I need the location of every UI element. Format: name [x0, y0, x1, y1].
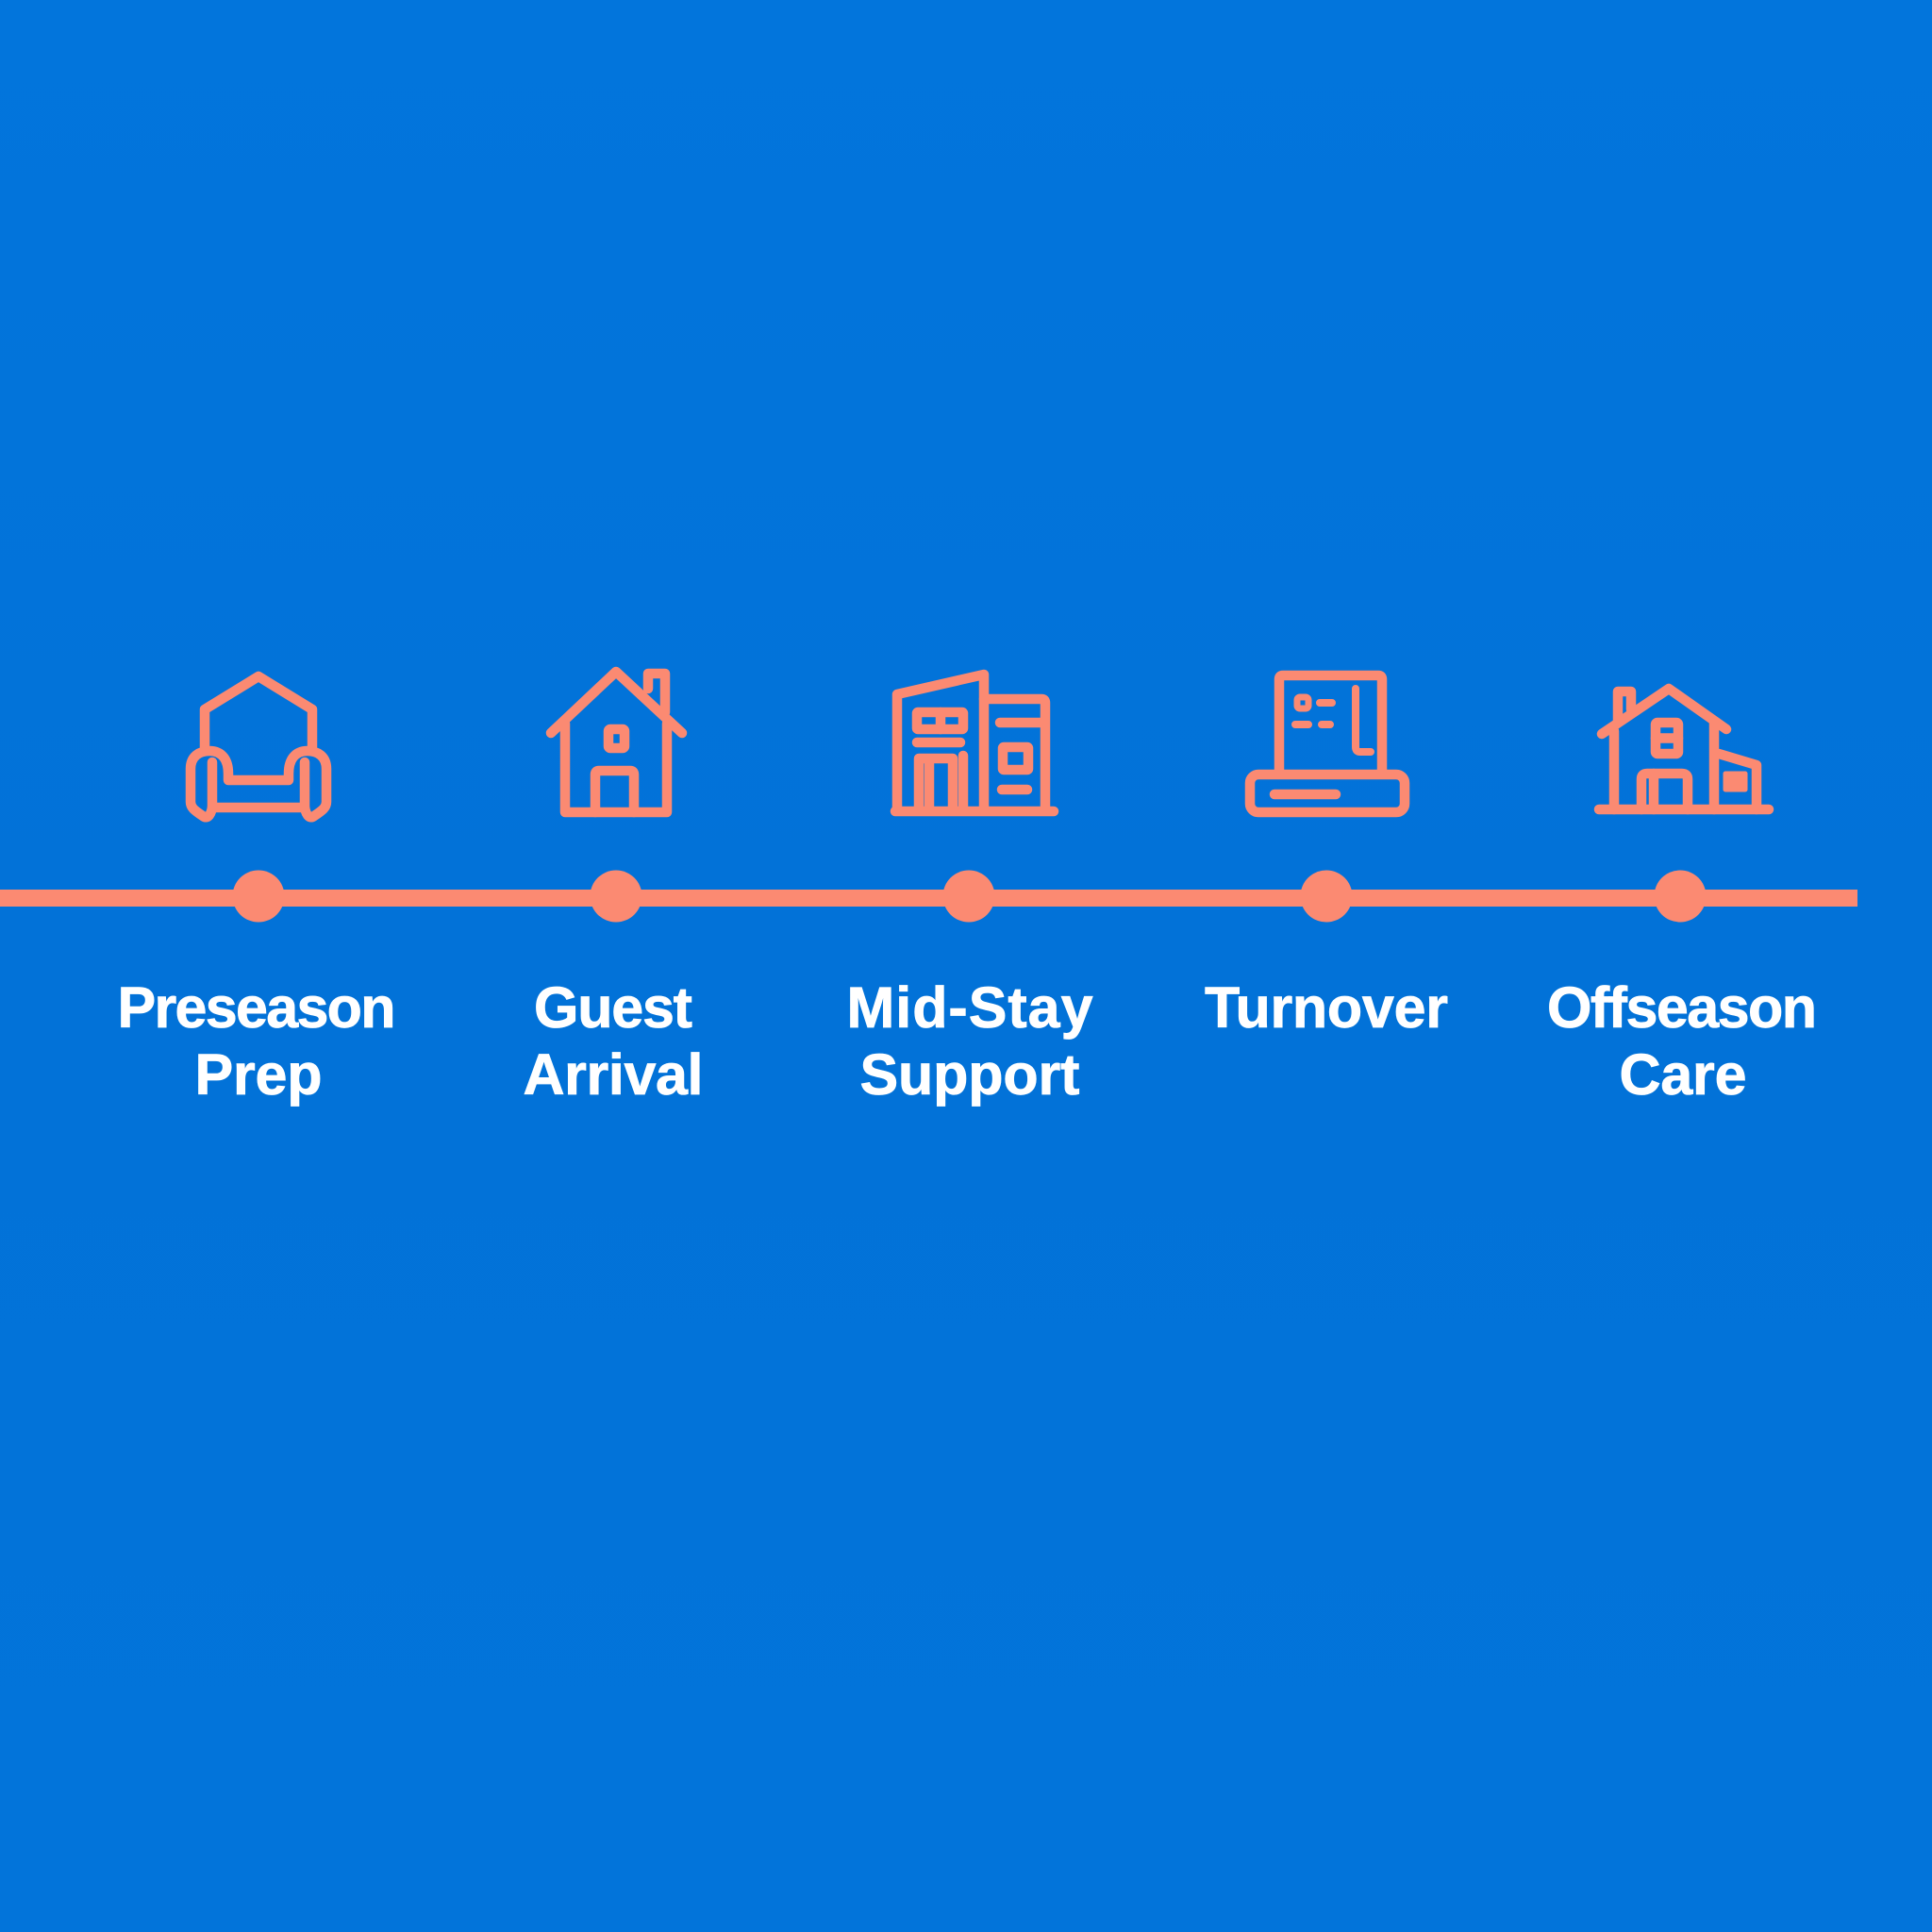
timeline node 1: [232, 870, 285, 923]
label: Turnover: Turnover: [1205, 975, 1448, 1040]
timeline node 5: [1655, 870, 1706, 923]
step 4: Turnover: [1205, 675, 1448, 1040]
step 1: Preseason Prep: [117, 676, 396, 1107]
timeline node 3: [943, 870, 994, 923]
timeline node 2: [591, 870, 641, 923]
timeline node 4: [1300, 870, 1353, 923]
label: Preseason Prep: Preseason: [117, 975, 396, 1040]
icon: house with chimney: [551, 672, 682, 812]
label: Offseason Care: Offseason: [1547, 975, 1817, 1040]
label: Preseason Prep: Prep: [194, 1042, 323, 1107]
label: Guest Arrival: Guest: [534, 975, 692, 1040]
label: Guest Arrival: Arrival: [523, 1042, 704, 1107]
icon: armchair: [191, 676, 326, 817]
label: Mid-Stay Support: Support: [860, 1042, 1079, 1107]
icon: document on tray: [1250, 675, 1405, 812]
label: Mid-Stay Support: [847, 975, 1093, 1107]
icon: house with annex: [1599, 689, 1769, 809]
step 5: Offseason Care: [1547, 689, 1817, 1107]
timeline line: [0, 890, 1857, 907]
step 2: Guest Arrival: [523, 672, 704, 1107]
label: Mid-Stay Support: Mid-Stay: [847, 975, 1093, 1040]
label: Preseason Prep: [117, 975, 396, 1107]
step 3: Mid-Stay Support: [847, 675, 1093, 1107]
icon: modern building: [895, 675, 1054, 811]
label: Offseason Care: Care: [1619, 1042, 1747, 1107]
label: Offseason Care: [1547, 975, 1817, 1107]
label: Guest Arrival: [523, 975, 704, 1107]
